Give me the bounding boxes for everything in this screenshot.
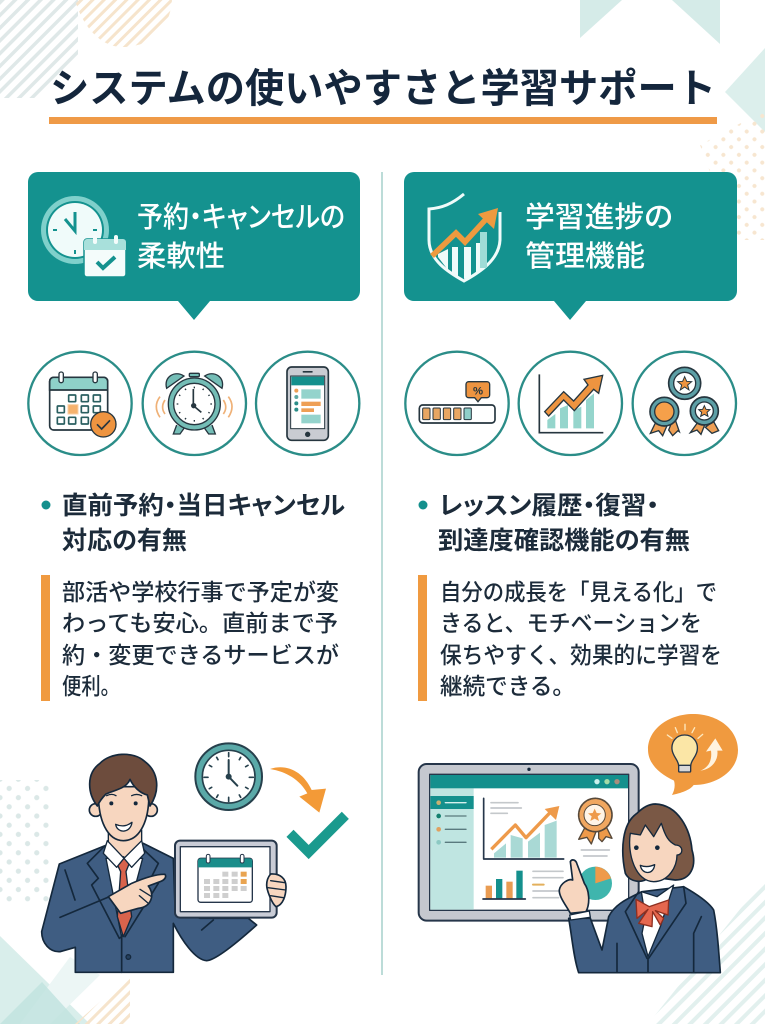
bullet heading: booking: 対応の有無 [62,527,187,555]
student jacket [569,887,720,973]
bullet heading: progress: 到達度確認機能の有無 [438,527,690,555]
pointing hand [108,874,166,913]
accent bar: progress [418,575,427,701]
body text: booking: 便利。 [62,673,120,699]
body text: progress: 自分の成長を「見える化」で [440,579,717,605]
lapels and seams [617,887,701,973]
speech bubble with lightbulb [648,714,738,795]
jacket [42,843,257,972]
icon: progress bar: % [473,386,483,398]
icon: shield with rising arrow [429,194,500,281]
illustration: businessman with tablet [42,743,345,972]
icon: progress bar [405,352,509,455]
heading text: booking: 予約・キャンセルの [137,201,345,234]
center divider [381,172,383,975]
right hand [267,874,286,907]
body text: booking: 部活や学校行事で予定が変 [62,579,339,605]
lapels [87,847,158,938]
icon: clock and calendar [41,196,126,277]
tablet [175,841,277,918]
body text: progress: きると、モチベーションを [440,610,702,636]
icon: calendar with check [28,352,132,455]
bullet heading: progress [418,492,690,555]
heading box: booking [28,172,360,320]
panel: learning progress management: 管理機能 [525,240,645,273]
icon: growth chart [519,352,622,455]
pointing hand and cuff [559,860,590,920]
body text: progress: 保ちやすく、効果的に学習を [440,642,722,668]
head [89,754,157,841]
heading text: progress: 学習進捗の [525,201,673,234]
background decoration: bottom left shapes [0,780,130,1024]
neck [108,830,142,858]
icon row: progress [405,352,736,455]
blouse [641,885,674,957]
body text: progress: 継続できる。 [440,673,575,699]
body text: booking: 約・変更できるサービスが [62,642,339,668]
icon: alarm clock [143,352,246,455]
body text: booking: わっても安心。直前まで予 [62,610,338,636]
icon: wall clock [195,743,262,810]
shirt [106,858,143,937]
panel: flexibility of booking and cancelling: 柔軟性 [137,240,225,273]
check mark [290,815,345,852]
illustration: student with laptop dashboard [419,714,738,973]
dashboard screen [419,764,639,921]
collar [103,841,145,867]
title underline [49,117,717,124]
bullet heading: booking [42,492,345,555]
title: システムの使いやすさと学習サポート [50,67,716,111]
body text: booking [62,579,339,699]
body text: progress [440,579,722,699]
arrow: clock to check [270,767,326,813]
accent bar: booking [41,575,50,701]
tie [117,857,132,937]
bow tie [636,899,669,927]
panel: flexibility of booking and cancelling [28,172,360,972]
student head [623,804,694,882]
icon: smartphone [256,352,359,455]
background decoration: top left stripes [0,0,172,98]
heading box: progress [404,172,737,320]
bullet heading: booking: 直前予約・当日キャンセル [62,492,345,520]
background decoration: bottom right stripes [648,878,765,1024]
bullet heading: progress: レッスン履歴・復習・ [439,492,659,520]
background decoration: top right shapes [580,0,765,240]
icon: award medals [633,352,736,455]
icon row: booking [28,352,359,455]
panel: learning progress management [404,172,738,973]
